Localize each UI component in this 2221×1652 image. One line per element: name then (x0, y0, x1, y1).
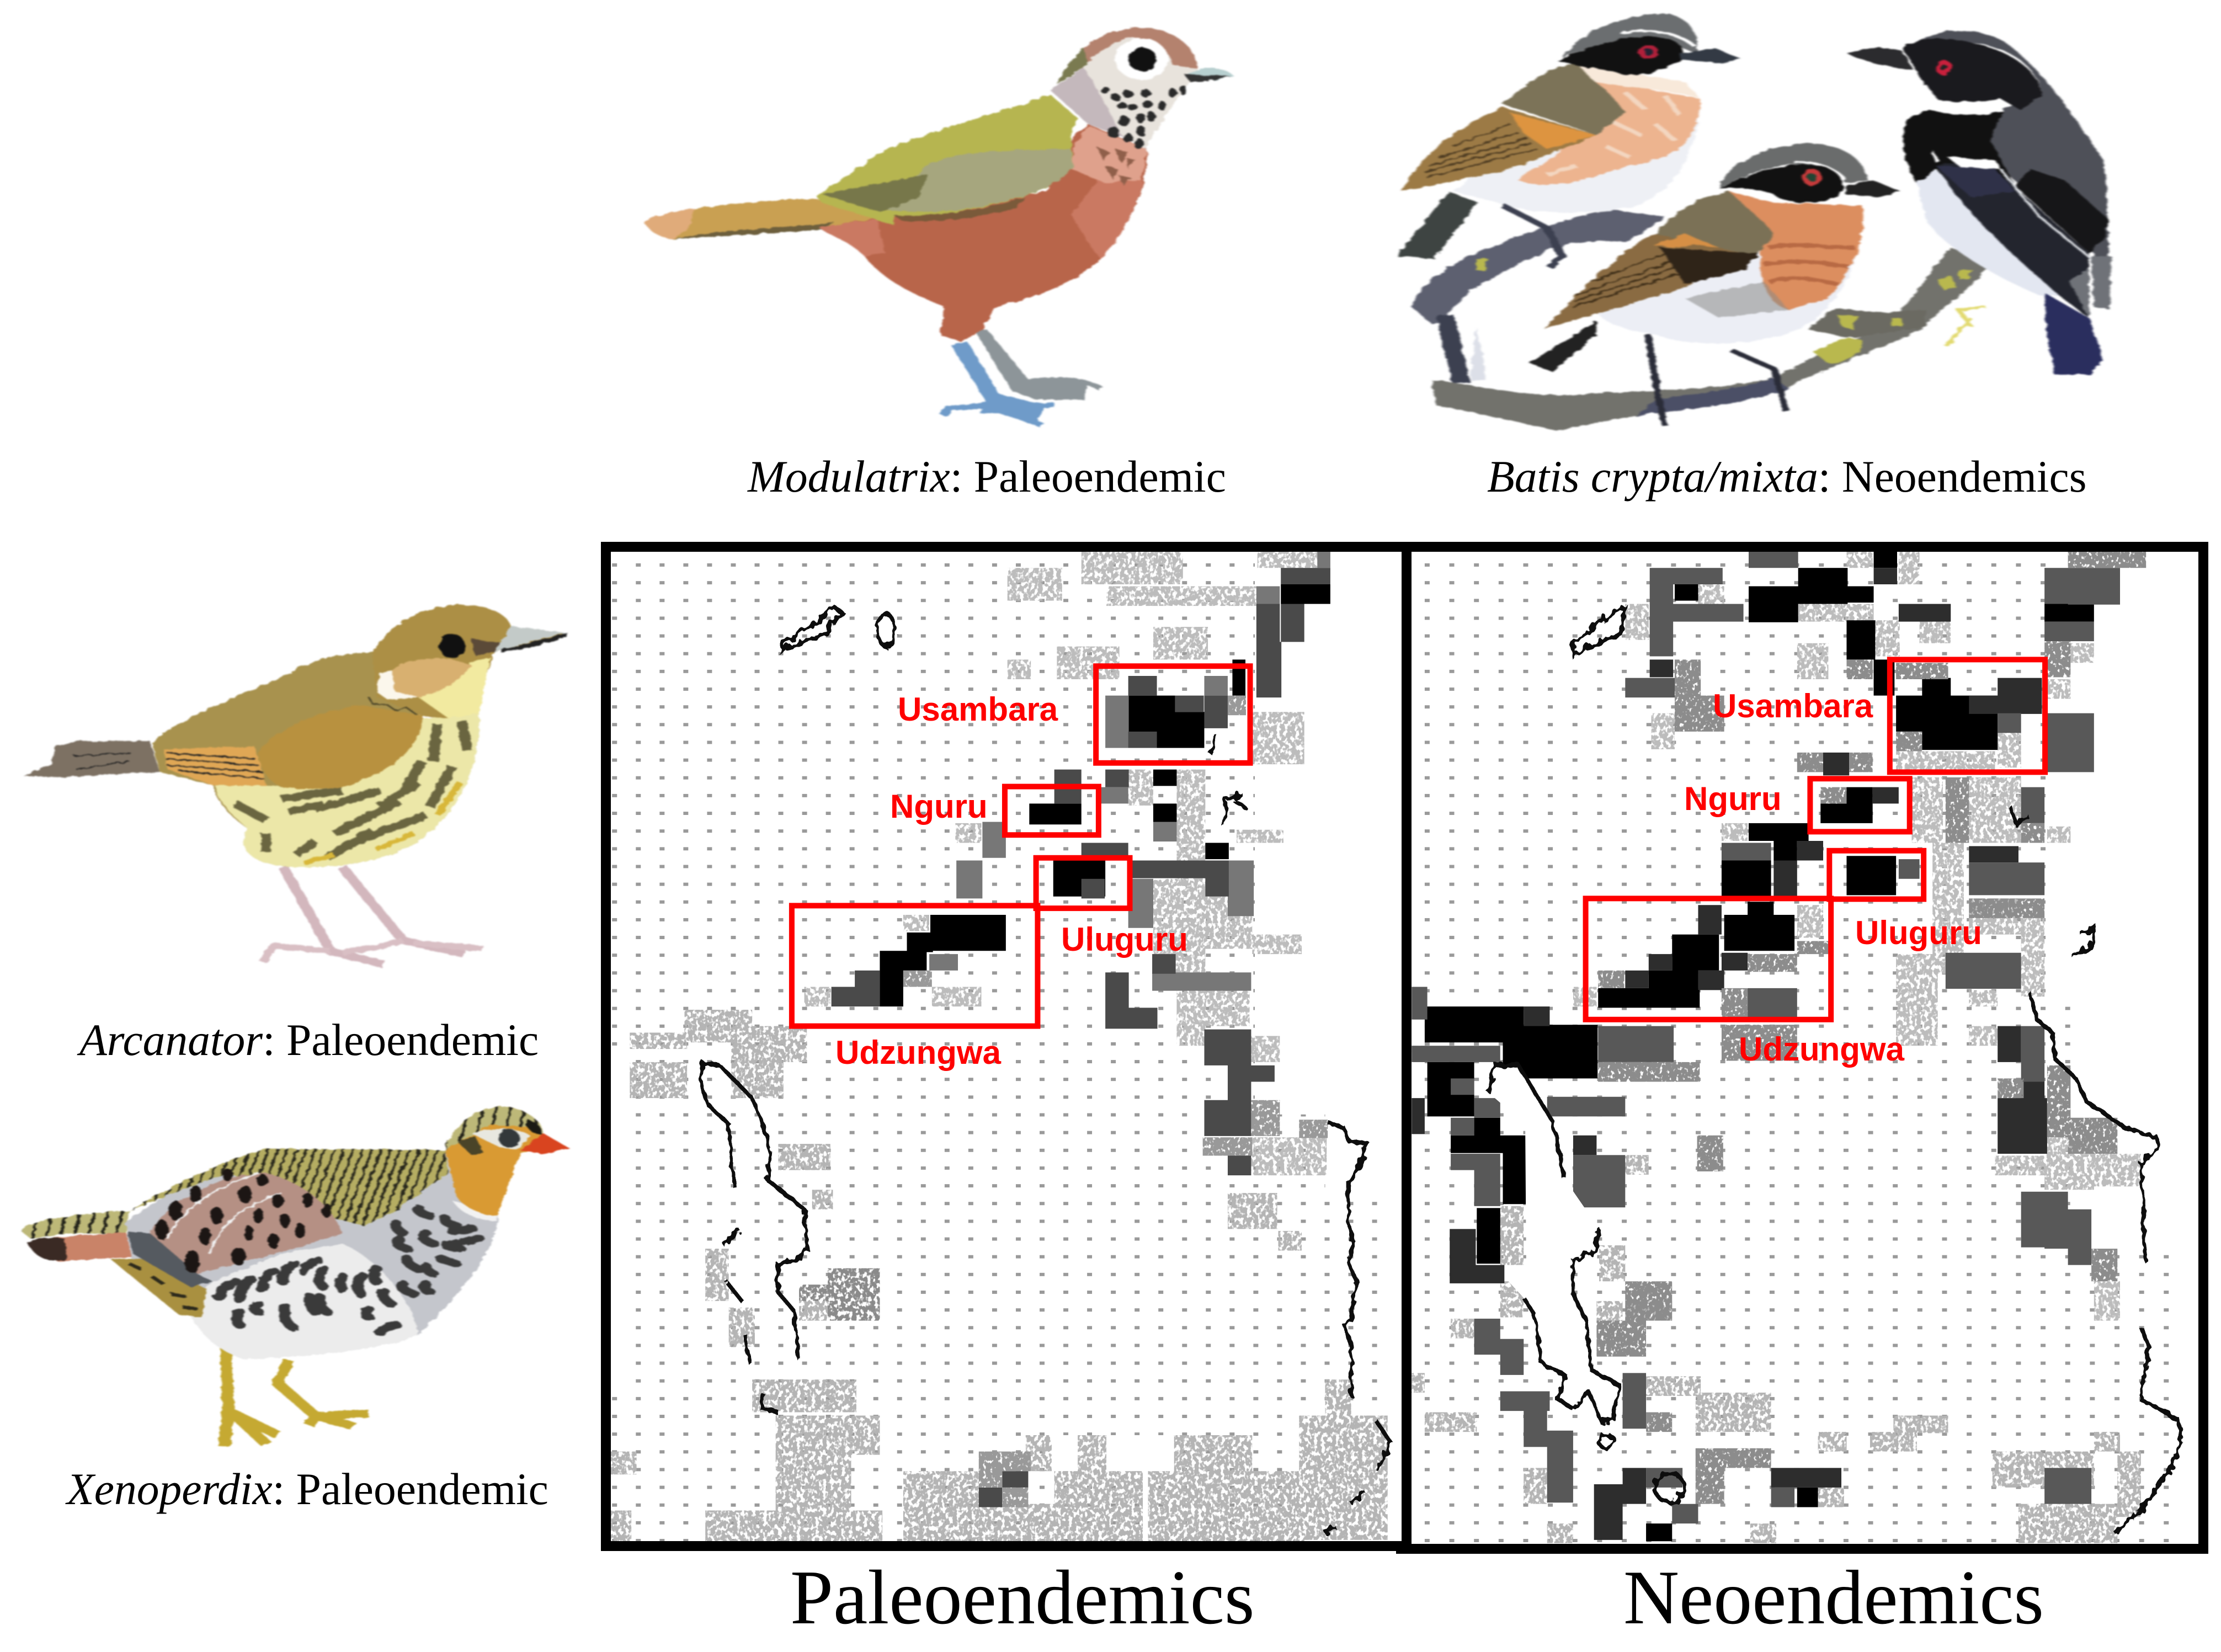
map panel: Paleoendemics (610, 551, 1402, 1543)
map labels: Neoendemics (1684, 688, 1982, 1068)
highlight boxes (792, 666, 1250, 1026)
illustration: Batis birds on branch (1397, 14, 2111, 431)
map labels: Paleoendemics (835, 691, 1188, 1071)
caption: Arcanator: Arcanator: Paleoendemic (77, 1015, 539, 1065)
map labels: Paleoendemics: Nguru (890, 788, 988, 825)
map labels: Neoendemics: Udzungwa (1739, 1031, 1905, 1068)
map labels: Paleoendemics: Udzungwa (835, 1034, 1002, 1071)
outline: lakes and coast (700, 606, 1390, 1533)
map labels: Neoendemics: Usambara (1713, 688, 1873, 724)
heading: Neoendemics: Neoendemics (1623, 1555, 2044, 1640)
highlight boxes (1586, 659, 2045, 1020)
frame: left map (606, 547, 1407, 1546)
map panel: Neoendemics (1412, 551, 2198, 1543)
heading: Paleoendemics: Paleoendemics (790, 1555, 1255, 1640)
illustration: Xenoperdix bird (21, 1106, 570, 1446)
map labels: Paleoendemics: Usambara (898, 691, 1058, 728)
frame: right map (1396, 547, 2203, 1549)
map labels: Paleoendemics: Uluguru (1061, 921, 1188, 958)
outline: lakes and coast (1487, 607, 2182, 1533)
illustration: Modulatrix bird (645, 28, 1234, 425)
caption: Xenoperdix: Xenoperdix: Paleoendemic (65, 1464, 548, 1514)
map labels: Neoendemics: Uluguru (1855, 914, 1982, 951)
illustration: Arcanator bird (23, 605, 568, 964)
caption: Modulatrix: Modulatrix: Paleoendemic (747, 451, 1226, 502)
lake: Malawi fill (1487, 1065, 1620, 1422)
caption: Batis: Batis crypta/mixta: Neoendemics (1487, 451, 2086, 502)
map labels: Neoendemics: Nguru (1684, 780, 1782, 817)
